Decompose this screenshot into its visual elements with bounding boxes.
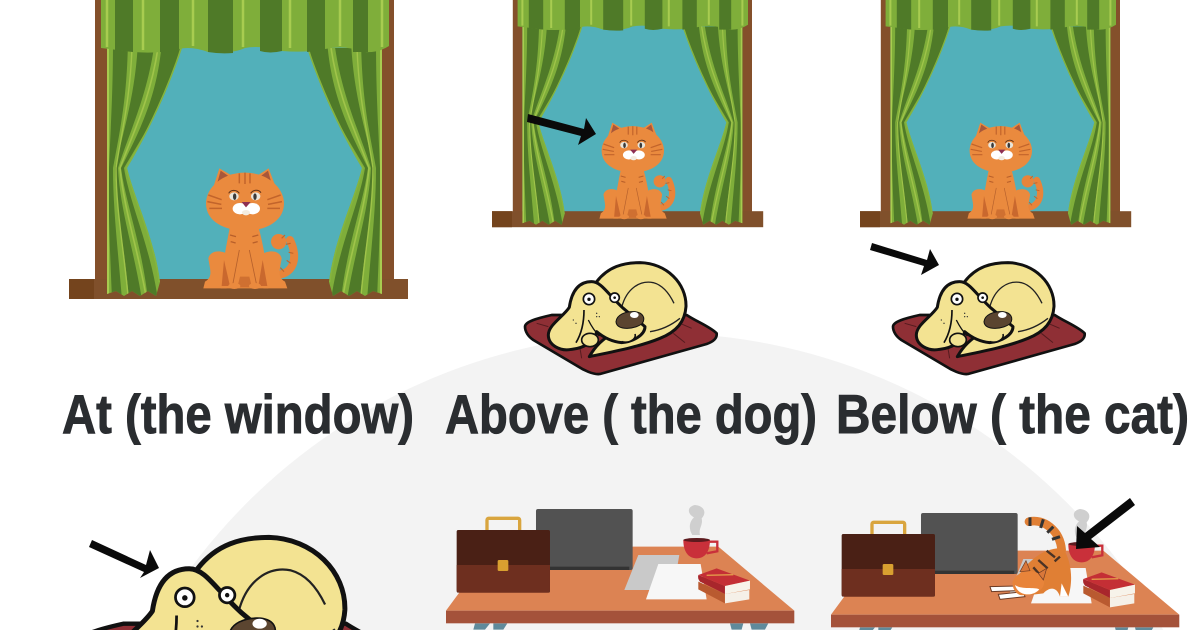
panel: above the dog bbox=[492, 0, 763, 374]
icon: stretching cat bbox=[990, 517, 1071, 599]
panel: desk bbox=[446, 505, 794, 630]
icon: cat sitting bbox=[967, 123, 1040, 219]
icon: dog on cushion bbox=[525, 263, 717, 374]
panel: large dog bbox=[79, 537, 396, 630]
icon: cat sitting bbox=[599, 123, 672, 219]
panel: at the window bbox=[69, 0, 408, 300]
icon: desk with briefcase, laptop, cup and books bbox=[831, 509, 1179, 630]
arrow pointing at cup bbox=[1076, 498, 1135, 549]
icon: large dog bbox=[79, 537, 396, 630]
window with curtains bbox=[492, 0, 763, 228]
arrow pointing at dog's head bbox=[89, 540, 159, 578]
icon: cat sitting bbox=[203, 168, 294, 289]
icon: dog on cushion bbox=[893, 263, 1085, 374]
background: grey arc bbox=[77, 333, 1200, 630]
label: Above ( the dog): Above ( the dog) bbox=[445, 383, 817, 445]
panel: desk with cat bbox=[831, 498, 1179, 630]
panel: below the cat bbox=[860, 0, 1131, 374]
icon: desk with briefcase, laptop, cup and books bbox=[446, 505, 794, 630]
window with curtains bbox=[860, 0, 1131, 228]
arrow pointing at dog bbox=[870, 243, 939, 275]
label: At (the window): At (the window) bbox=[62, 383, 414, 445]
window with curtains bbox=[69, 0, 408, 300]
arrow pointing at cat bbox=[527, 114, 596, 145]
